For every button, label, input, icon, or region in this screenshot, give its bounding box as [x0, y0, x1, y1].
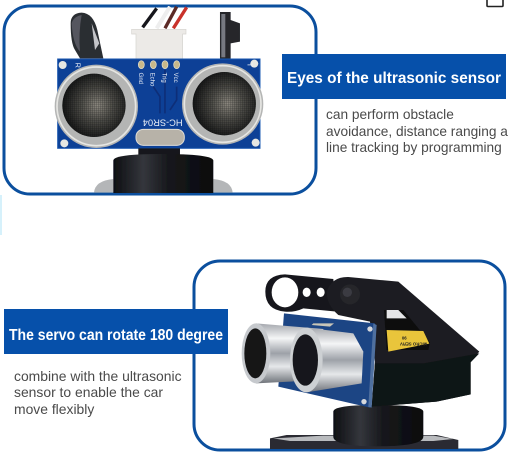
base neck: [138, 148, 180, 155]
heading: eyes of the ultrasonic sensor: Eyes of the ultrasonic sensor: [287, 70, 501, 87]
crystal: [136, 129, 184, 145]
heading: the servo can rotate 180 degree: The servo can rotate 180 degree: [9, 327, 223, 344]
micro servo label: 90: [401, 336, 407, 341]
board labels: Trig: [160, 73, 166, 83]
left transducer: [55, 65, 138, 148]
right transducer: [182, 63, 263, 145]
board details: [59, 60, 260, 147]
text block: servo description: combine with the ultrasonic: [14, 368, 182, 384]
board labels: Vcc: [172, 73, 178, 83]
pivot screw: [340, 284, 360, 304]
servo window: [384, 310, 430, 350]
right bracket ring: [220, 12, 240, 59]
text block: sensor description: avoidance, distance ranging a: [326, 124, 508, 139]
panel: servo photo: [194, 261, 505, 450]
text block: servo description: move flexibly: [14, 401, 94, 417]
front transducer: [290, 328, 363, 392]
board labels: T: [245, 63, 254, 68]
board labels: R: [73, 63, 82, 68]
rear transducer: [242, 323, 323, 383]
corner fragment icon: [487, 0, 503, 6]
wires: [143, 7, 187, 28]
text block: sensor description: can perform obstacle: [326, 107, 454, 122]
micro servo label: MICRO SERV: [400, 341, 427, 346]
micro servo label: [387, 330, 429, 352]
panel: ultrasonic sensor photo: [4, 6, 316, 194]
left edge tint: [0, 195, 2, 235]
board labels: HC-SR04: [143, 117, 183, 127]
connector: [132, 29, 186, 59]
servo cylinder: [333, 405, 423, 446]
base plate: [270, 435, 458, 449]
ring bracket: [265, 274, 337, 312]
tilt bracket body: [327, 277, 479, 407]
heading: eyes of the ultrasonic sensor: [282, 54, 506, 99]
heading: the servo can rotate 180 degree: [4, 309, 228, 354]
board labels: Echo: [149, 73, 155, 87]
left bracket ring: [71, 13, 103, 58]
board labels: Gnd: [137, 73, 143, 84]
servo cylinder: [113, 154, 213, 193]
circuit board: [58, 59, 260, 148]
text block: sensor description: line tracking by programming: [326, 140, 502, 155]
base mounts: [94, 179, 233, 193]
sensor board: [278, 313, 375, 408]
text block: servo description: sensor to enable the car: [14, 384, 163, 400]
board labels: [73, 63, 254, 127]
